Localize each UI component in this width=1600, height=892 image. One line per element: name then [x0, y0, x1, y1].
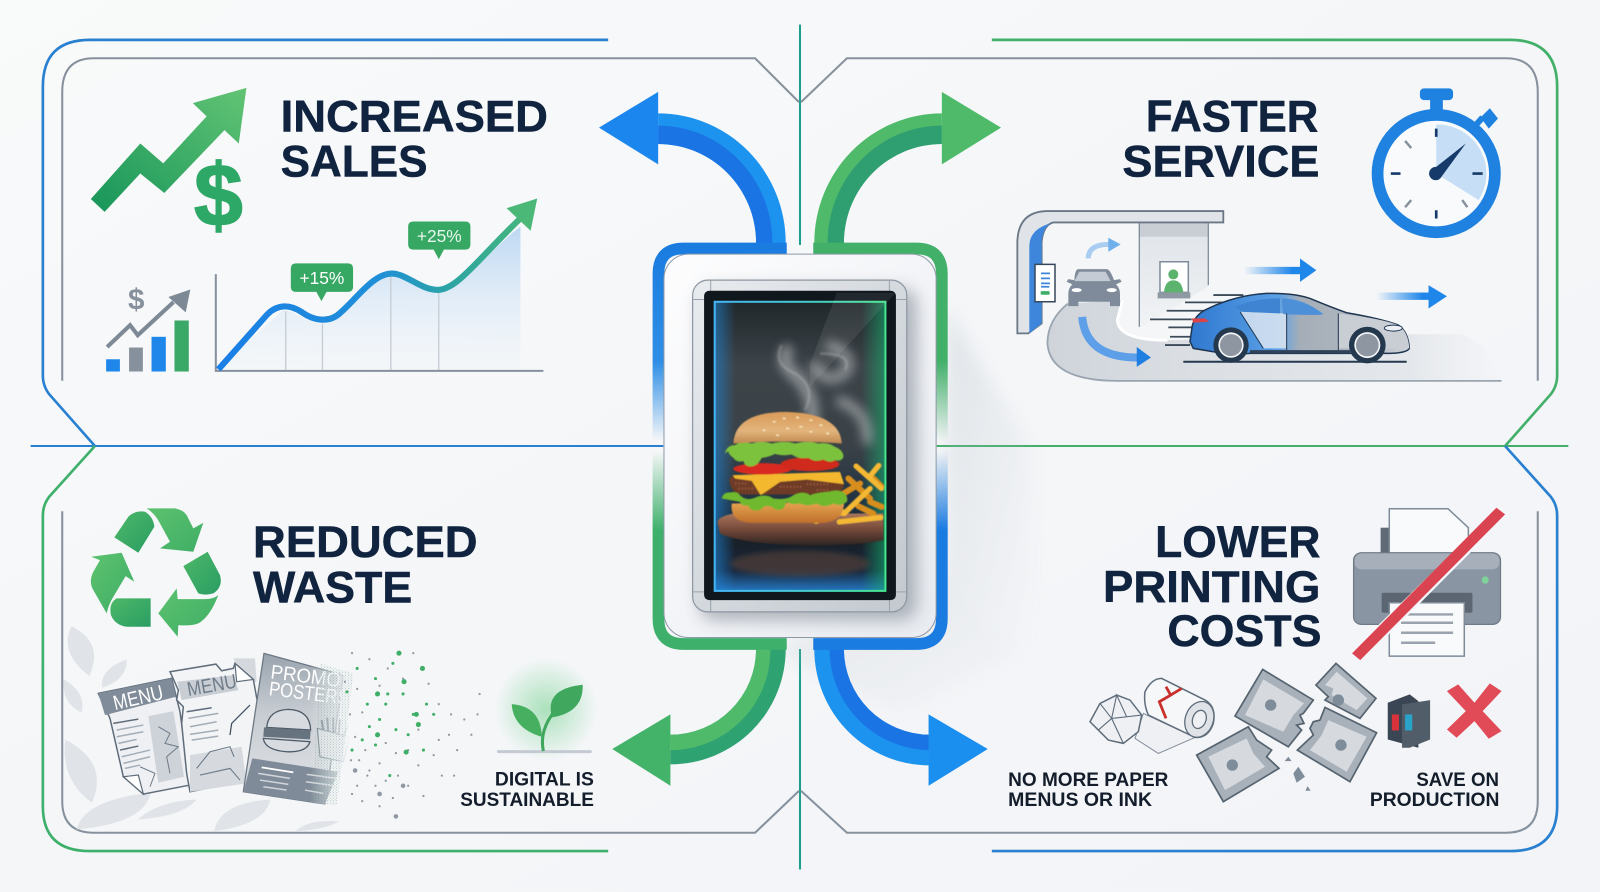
- caption: digital is sustainable: DIGITAL IS: [495, 768, 594, 790]
- device drop shadow: [776, 306, 1031, 714]
- dissolving particles: [345, 653, 480, 816]
- heading: reduced waste: [253, 516, 478, 613]
- cheese: [733, 472, 844, 495]
- poster: [243, 653, 353, 804]
- heading: reduced waste: WASTE: [253, 562, 412, 613]
- heading: increased sales: [281, 91, 548, 187]
- inner frame: top left: [62, 58, 799, 381]
- frame band: blue and green corners: [658, 249, 942, 644]
- heading: lower printing costs: PRINTING: [1103, 561, 1320, 612]
- metal frame: [693, 280, 907, 612]
- poster dissolving edge: [303, 660, 357, 807]
- heading: lower printing costs: [1103, 516, 1321, 656]
- heading: increased sales: INCREASED: [281, 91, 548, 142]
- label: +25%: +25%: [417, 226, 462, 246]
- frame corner seams: [693, 280, 907, 612]
- panel: lower printing costs: [801, 446, 1557, 851]
- arrow: green to reduced waste: [612, 649, 786, 786]
- heading: increased sales: SALES: [281, 136, 428, 187]
- icon: recycle: [91, 508, 221, 637]
- line chart: [216, 198, 543, 372]
- upper lettuce: [725, 442, 843, 467]
- caption: digital is sustainable: SUSTAINABLE: [460, 789, 594, 811]
- illustration: moving car: [1150, 293, 1409, 363]
- heading: reduced waste: REDUCED: [253, 516, 478, 567]
- burger photo: [717, 412, 883, 576]
- illustration: drive-through canopy, kiosk, window and small car: [1017, 211, 1223, 333]
- plate reflection: [730, 551, 870, 576]
- panel: faster service: [801, 40, 1557, 446]
- plate: [717, 514, 883, 545]
- panel: increased sales: [43, 40, 799, 446]
- caption: no more paper menus or ink: MENUS OR INK: [1008, 789, 1152, 811]
- menu two: MENU: [185, 671, 238, 701]
- illustration: paper menus and poster: [98, 653, 357, 807]
- heading: faster service: FASTER: [1146, 91, 1318, 142]
- screen contents: [715, 293, 895, 591]
- icon: small bar chart: $: [128, 283, 145, 316]
- caption: save on production: SAVE ON: [1416, 769, 1499, 791]
- heading: lower printing costs: COSTS: [1167, 605, 1321, 656]
- screen: [704, 291, 896, 600]
- illustration: crumpled paper and roll: [1090, 678, 1219, 753]
- small car: [1067, 269, 1122, 306]
- glass reflection: [810, 293, 895, 387]
- outer frame: bottom right: [992, 446, 1557, 851]
- poster: POSTERS: [268, 678, 350, 710]
- patty: [729, 475, 843, 495]
- caption: no more paper menus or ink: [1008, 769, 1168, 811]
- label: +15%: [291, 263, 353, 301]
- central display: [658, 249, 942, 644]
- poster: PROMOT: [269, 662, 353, 693]
- outer frame: top right: [992, 40, 1557, 446]
- arrow: blue to increased sales: [599, 92, 786, 243]
- speed arrows: [1244, 259, 1447, 309]
- arrow: blue to lower printing costs: [814, 649, 988, 786]
- curved arrow: [1088, 244, 1109, 258]
- caption: save on production: [1370, 769, 1499, 811]
- neon border: [715, 302, 885, 591]
- panel: reduced waste: [43, 446, 799, 851]
- sesame: [763, 417, 828, 435]
- arrow: green to faster service: [814, 92, 1001, 243]
- label: +25%: [408, 222, 470, 259]
- caption: digital is sustainable: [460, 768, 594, 811]
- tomato: [733, 463, 792, 475]
- icon: red x: [1447, 683, 1502, 739]
- illustration: road: [1047, 300, 1502, 381]
- smoke: [785, 345, 867, 444]
- icon: ink cartridges: [1388, 694, 1430, 748]
- metal frame shadow: [699, 288, 917, 620]
- bottom bun: [731, 502, 844, 523]
- heading: lower printing costs: LOWER: [1155, 516, 1320, 567]
- illustration: torn money: [1197, 663, 1377, 802]
- icon: stopwatch: [1378, 88, 1498, 232]
- menu one: MENU: [111, 681, 165, 715]
- icon: growth arrow with dollar: $: [194, 147, 243, 245]
- kiosk: [1035, 264, 1055, 302]
- caption: save on production: PRODUCTION: [1370, 789, 1499, 811]
- caption: no more paper menus or ink: NO MORE PAPER: [1008, 769, 1168, 791]
- heading: faster service: [1122, 91, 1319, 187]
- inner frame: top right: [801, 58, 1538, 381]
- inner frame: bottom left: [62, 511, 799, 833]
- icon: small bar chart: [106, 283, 190, 372]
- menu one: [98, 678, 190, 794]
- heading: faster service: SERVICE: [1122, 136, 1319, 187]
- outer frame: top left: [43, 40, 608, 446]
- icon: sprout with glow: [495, 658, 597, 760]
- icon: growth arrow with dollar: [91, 88, 246, 245]
- label: +15%: +15%: [300, 268, 344, 288]
- top bun: [733, 412, 842, 444]
- window with attendant: [1160, 262, 1188, 292]
- menu two: [170, 658, 258, 792]
- icon: crossed out printer: [1348, 506, 1509, 662]
- inner frame: bottom right: [801, 511, 1538, 833]
- outer frame: bottom left: [43, 446, 608, 851]
- white card: [664, 254, 936, 638]
- fries: [816, 466, 882, 522]
- decorative leaves: [63, 626, 339, 831]
- lower lettuce: [722, 491, 847, 511]
